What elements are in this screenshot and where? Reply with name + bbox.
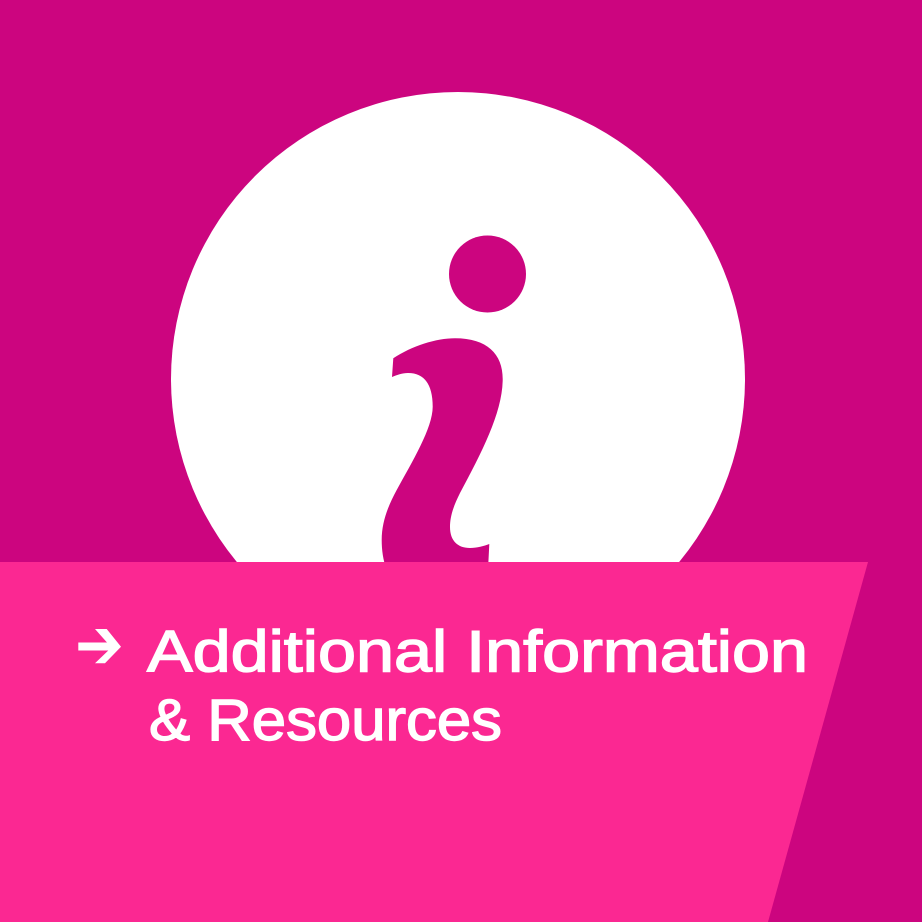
heading line 1: Additional Information bbox=[147, 620, 808, 684]
icon: information symbol in circle bbox=[171, 92, 745, 666]
icon: stem of the letter i bbox=[382, 338, 503, 570]
heading line 2: & Resources bbox=[149, 688, 502, 753]
icon: arrow bbox=[78, 629, 121, 663]
icon: dot of the letter i bbox=[449, 236, 526, 312]
heading bbox=[147, 620, 808, 753]
banner shape bbox=[0, 562, 868, 922]
panel: title banner bbox=[0, 562, 868, 922]
icon circle bbox=[171, 92, 745, 666]
